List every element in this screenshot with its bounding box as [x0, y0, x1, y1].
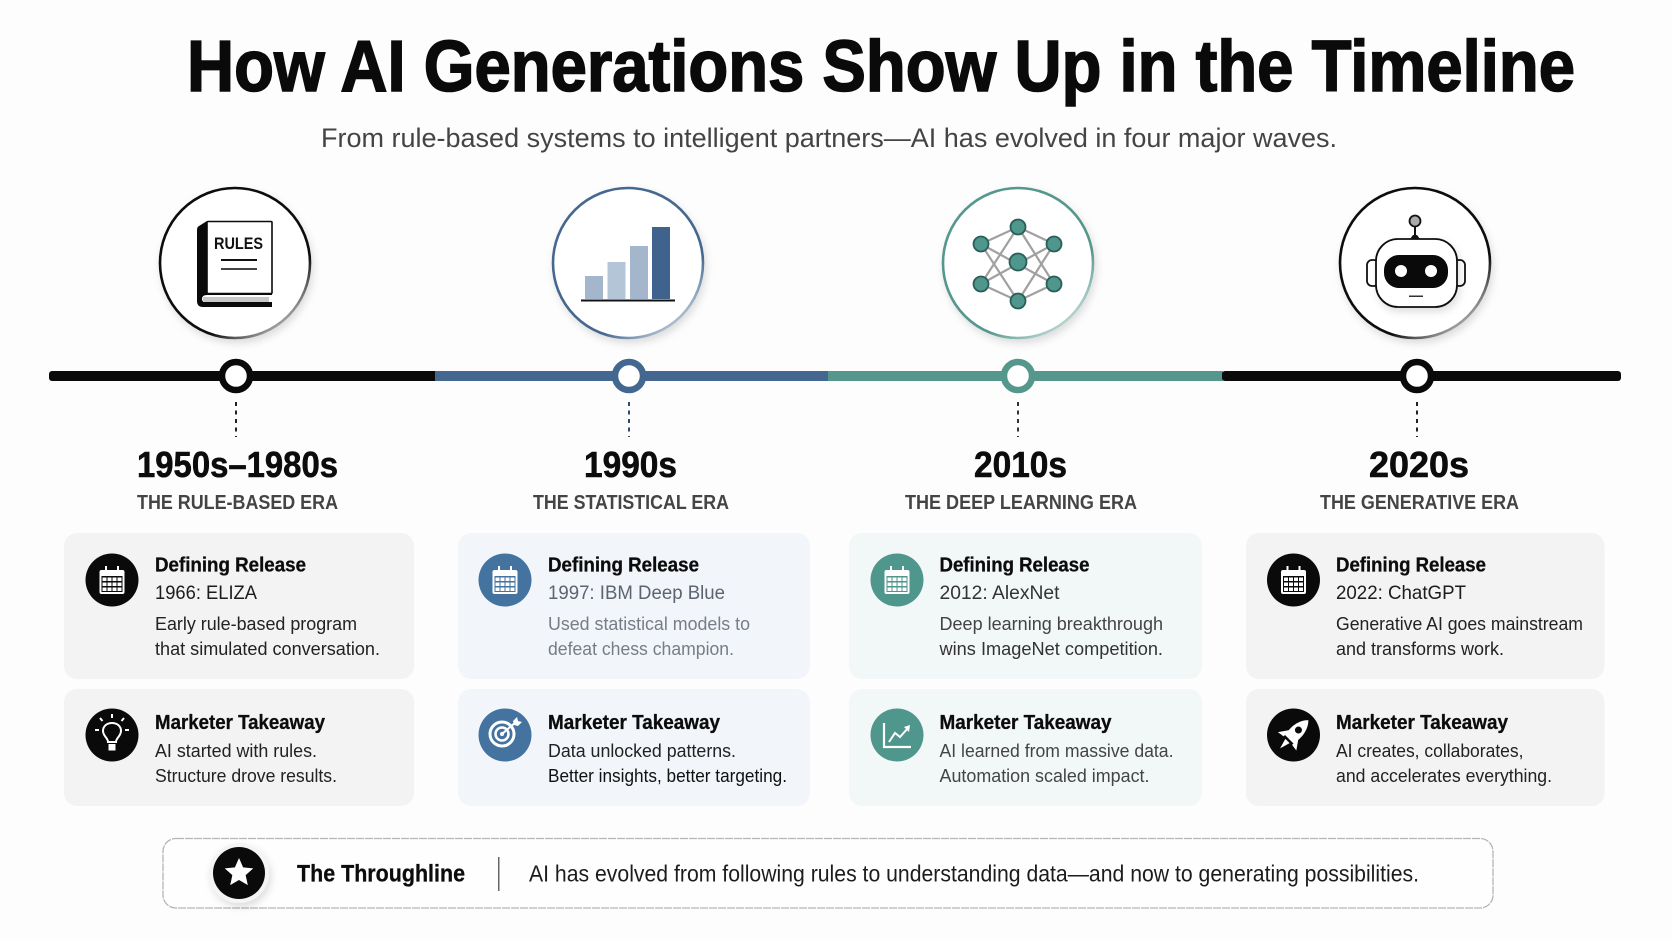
text: defining release: Early rule-based program — [155, 613, 357, 634]
text: marketer takeaway: Structure drove results. — [155, 765, 337, 786]
card: defining release — [64, 533, 414, 679]
panel: generative era column — [1246, 188, 1604, 806]
panel: rule-based era column — [64, 188, 414, 806]
era name: THE STATISTICAL ERA — [533, 492, 729, 514]
text: marketer takeaway: AI learned from massive data. — [940, 740, 1174, 761]
text: defining release: Defining Release — [1336, 554, 1486, 576]
text: defining release — [548, 554, 750, 659]
text: defining release — [155, 554, 380, 659]
text: defining release: Deep learning breakthrough — [940, 613, 1163, 634]
text: defining release — [939, 554, 1163, 659]
text: defining release: 1966: ELIZA — [155, 582, 257, 604]
subtitle: From rule-based systems to intelligent partners—AI has evolved in four major waves. — [321, 123, 1337, 153]
throughline message: AI has evolved from following rules to understanding data—and now to generating possibilities. — [529, 860, 1419, 886]
icon: robot in circle — [1340, 188, 1490, 338]
year: 2010s — [974, 444, 1067, 485]
text: marketer takeaway: AI creates, collaborates, — [1336, 740, 1524, 761]
era name: THE RULE-BASED ERA — [137, 492, 338, 514]
icon: bar chart in circle — [553, 188, 703, 338]
text: marketer takeaway: Marketer Takeaway — [1336, 712, 1509, 734]
connector — [1017, 402, 1019, 437]
era name: THE DEEP LEARNING ERA — [905, 492, 1137, 514]
text: defining release: Defining Release — [548, 554, 699, 576]
card: defining release — [1246, 533, 1604, 679]
text: marketer takeaway: and accelerates everything. — [1336, 765, 1552, 786]
card: marketer takeaway — [849, 689, 1202, 806]
text: marketer takeaway: Marketer Takeaway — [548, 712, 721, 734]
text: defining release: Used statistical models to — [548, 613, 750, 634]
text: defining release: defeat chess champion. — [548, 638, 734, 659]
icon: rules book in circle: RULES — [214, 235, 263, 253]
text: marketer takeaway: Data unlocked patterns. — [548, 740, 736, 761]
icon: light bulb — [86, 708, 138, 762]
card: marketer takeaway — [458, 689, 810, 806]
text: marketer takeaway: Better insights, better targeting. — [548, 765, 787, 786]
card: marketer takeaway — [1246, 689, 1604, 806]
text: marketer takeaway: Marketer Takeaway — [940, 712, 1112, 734]
icon: rules book in circle — [160, 188, 310, 338]
icon: neural network in circle — [943, 188, 1093, 338]
panel: deep learning era column — [849, 188, 1202, 806]
icon: rocket — [1256, 698, 1331, 772]
text: defining release: Defining Release — [155, 554, 306, 576]
icon: calendar — [1267, 554, 1320, 606]
connector — [628, 402, 630, 437]
year: 2020s — [1369, 444, 1469, 485]
icon: calendar — [478, 554, 532, 606]
text: defining release: Defining Release — [940, 554, 1090, 576]
text: defining release: 2012: AlexNet — [940, 582, 1060, 604]
year: 1990s — [584, 444, 677, 485]
text: defining release: 2022: ChatGPT — [1336, 582, 1466, 604]
icon: target — [478, 708, 532, 762]
timeline bar with era nodes — [49, 362, 1621, 390]
panel: the throughline — [163, 838, 1493, 908]
card: marketer takeaway — [64, 689, 414, 806]
text: defining release — [1336, 554, 1583, 659]
connector — [235, 402, 237, 437]
year: 1950s–1980s — [137, 444, 338, 485]
text: marketer takeaway: Marketer Takeaway — [155, 712, 326, 734]
text: marketer takeaway: Automation scaled impact. — [940, 765, 1150, 786]
divider — [498, 857, 500, 891]
icon: calendar — [86, 554, 138, 606]
panel: statistical era column — [458, 188, 810, 806]
text: defining release: that simulated conversation. — [155, 638, 380, 659]
text: marketer takeaway — [1336, 712, 1552, 786]
text: marketer takeaway — [548, 712, 787, 786]
throughline label: The Throughline — [297, 860, 465, 888]
card: defining release — [849, 533, 1202, 679]
connector — [1416, 402, 1418, 437]
icon: growth chart — [870, 708, 924, 762]
text: marketer takeaway — [940, 712, 1174, 786]
text: defining release: and transforms work. — [1336, 638, 1504, 659]
icon: star badge — [209, 843, 269, 903]
text: marketer takeaway: AI started with rules. — [155, 740, 317, 761]
text: defining release: Generative AI goes mainstream — [1336, 613, 1583, 634]
card: defining release — [458, 533, 810, 679]
text: defining release: 1997: IBM Deep Blue — [548, 582, 725, 604]
icon: calendar — [870, 554, 924, 606]
text: defining release: wins ImageNet competition. — [939, 638, 1163, 659]
era name: THE GENERATIVE ERA — [1320, 492, 1519, 514]
text: marketer takeaway — [155, 712, 337, 786]
